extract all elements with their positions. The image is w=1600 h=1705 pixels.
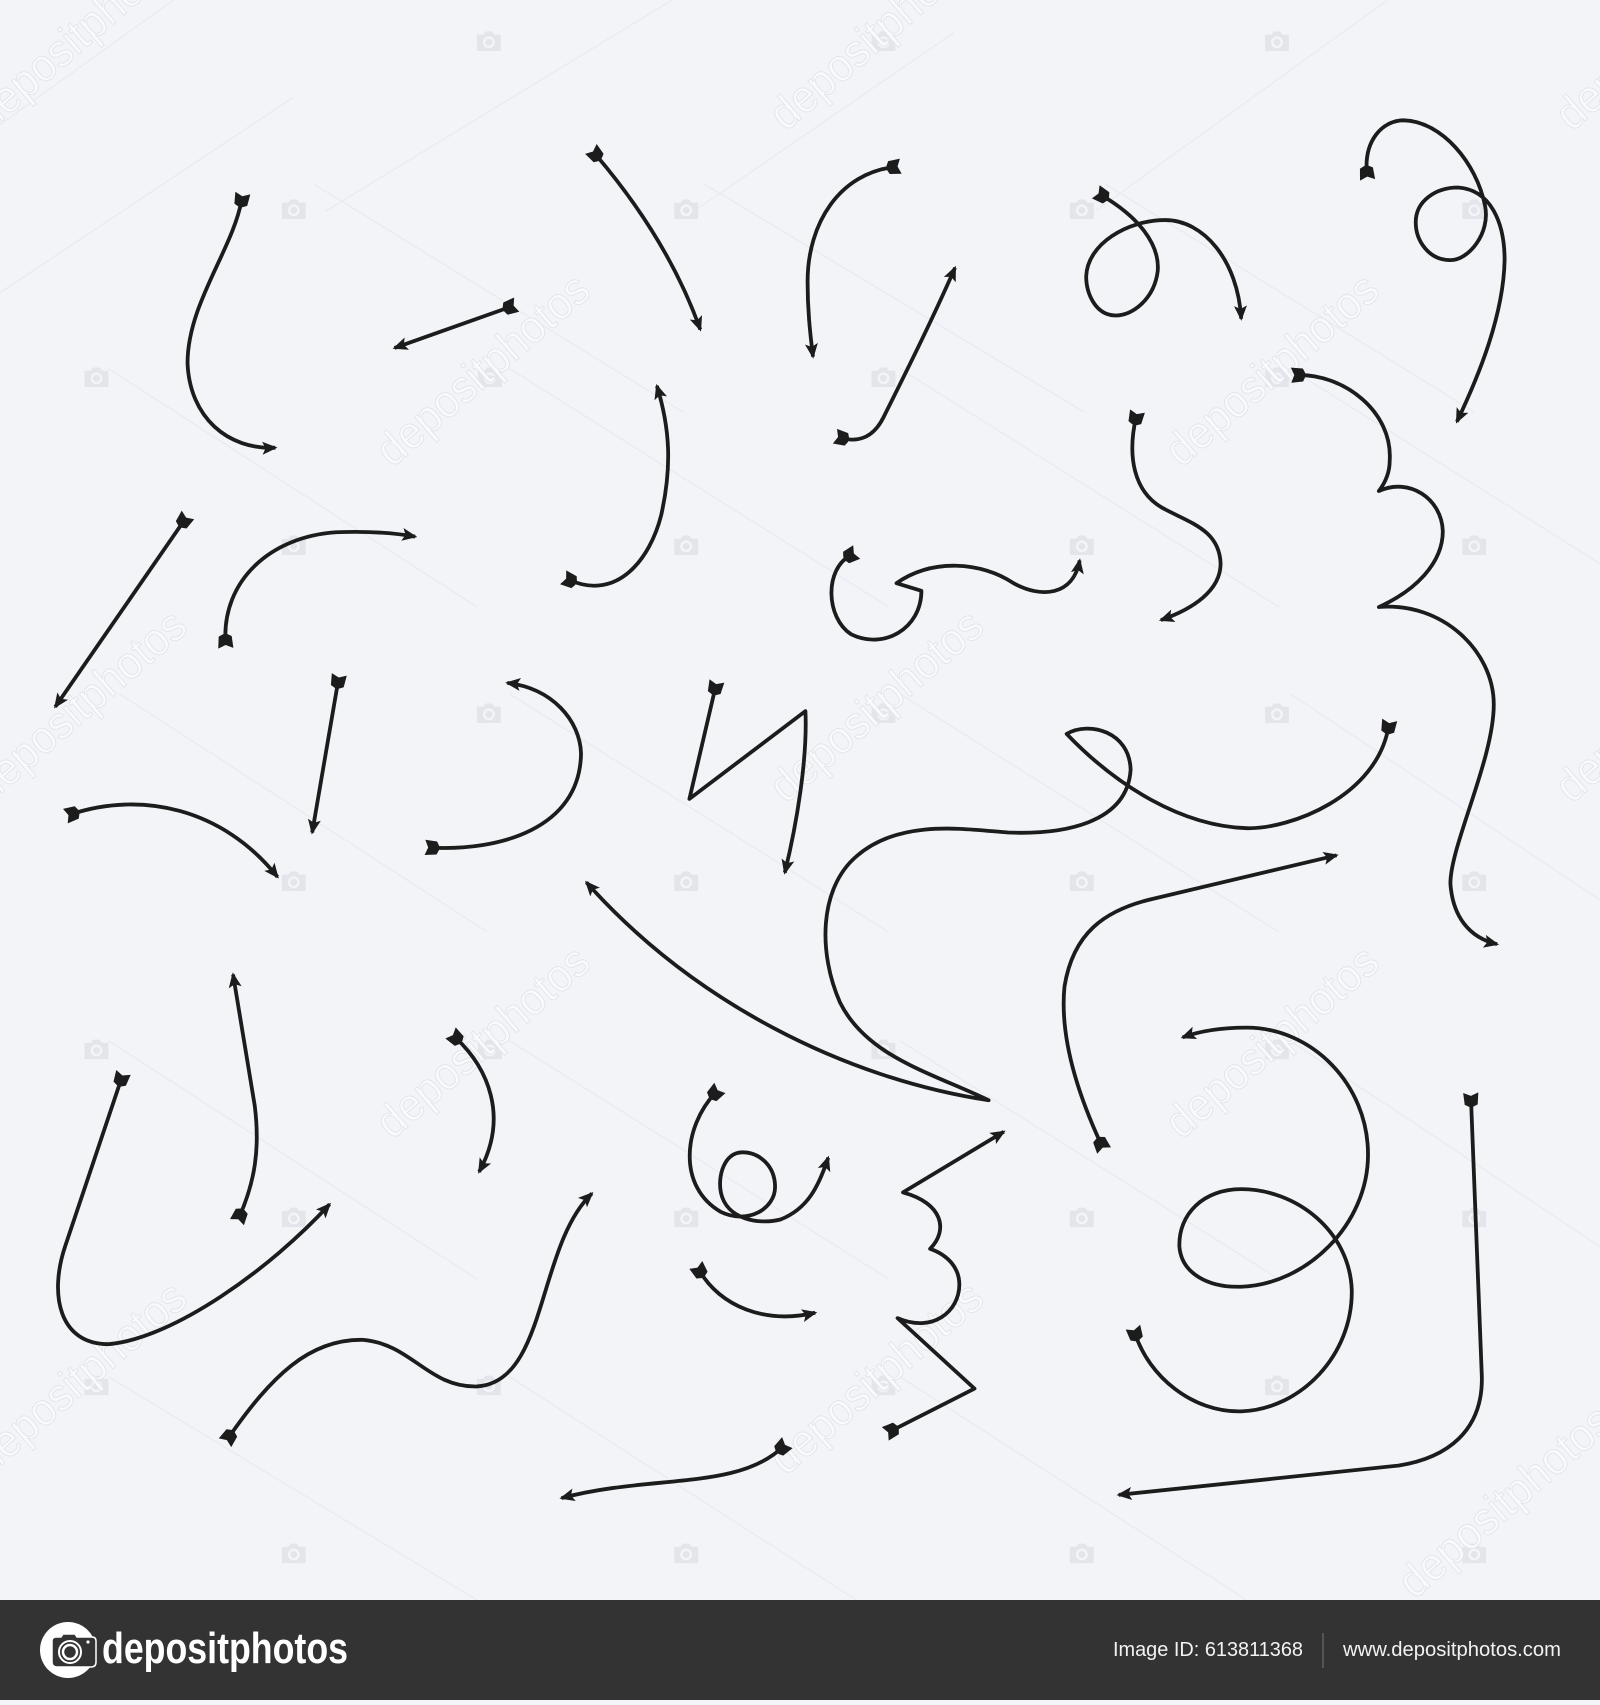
watermark pattern: depositphotos [759, 1271, 993, 1484]
watermark pattern: depositphotos [366, 935, 599, 1148]
arrow: very long looping centre [586, 726, 1389, 1100]
image id: Image ID: 613811368 [1113, 1638, 1303, 1661]
watermark pattern: depositphotos [366, 263, 599, 476]
arrow: short arc bottom centre [699, 1270, 815, 1316]
arrow: wave bottom left [229, 1193, 592, 1437]
arrow: arc left middle [72, 804, 278, 877]
arrow: U-curve bottom left [58, 1079, 330, 1344]
arrow: short straight [395, 307, 511, 348]
arrow: cloud scallop long right [1298, 375, 1497, 944]
logo wordmark: depositphotos [102, 1624, 348, 1673]
arrow: straight downward [312, 681, 338, 833]
arrow: curl with wave [831, 555, 1080, 640]
arrow: zigzag lightning [689, 687, 806, 873]
arrow: loop far top right [1367, 120, 1505, 422]
arrow: U-turn [431, 683, 581, 848]
arrow: hook centre pointing up [569, 386, 668, 586]
arrow: long straight left [55, 520, 184, 707]
watermark pattern: depositphotos [759, 599, 993, 812]
website url: www.depositphotos.com [1342, 1638, 1561, 1661]
arrow: scalloped zigzag [891, 1132, 1004, 1431]
arrow: S-curve centre right [1132, 417, 1221, 620]
arrow: S-curve top left [188, 199, 275, 448]
arrows group [55, 120, 1505, 1498]
footer bar [0, 1600, 1600, 1700]
arrow: large double loop [1135, 1028, 1368, 1411]
arrow: small loop bottom centre [690, 1093, 828, 1221]
arrow: hook pointing up right [841, 268, 955, 440]
arrow: arc pointing right [225, 532, 415, 642]
arrow: long arc top centre [595, 154, 700, 330]
arrow: single loop top right [1086, 195, 1241, 319]
arrow: small arc [455, 1037, 494, 1172]
icon: camera logo [40, 1622, 96, 1678]
arrow: gentle curve upward [233, 975, 257, 1216]
watermark pattern: depositphotos [1155, 263, 1389, 476]
arrow: arc bending left [808, 167, 894, 357]
arrow: long bend to upper right [1064, 855, 1337, 1145]
arrow: shallow curve bottom [562, 1447, 783, 1498]
arrow: corner bottom right [1119, 1099, 1482, 1495]
watermark pattern: depositphotos [1155, 935, 1389, 1148]
